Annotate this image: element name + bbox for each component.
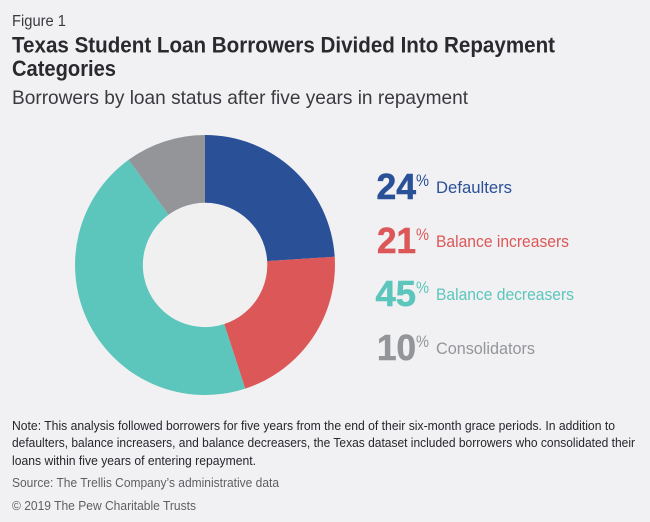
legend xyxy=(376,166,574,368)
title: Categories xyxy=(12,56,116,81)
legend item: defaulters xyxy=(376,166,512,207)
note xyxy=(12,419,635,468)
legend item: defaulters: % xyxy=(416,172,429,190)
legend item: balance increasers xyxy=(377,220,569,261)
legend item: balance increasers: 21 xyxy=(377,220,416,261)
legend item: consolidators xyxy=(377,327,535,368)
segment: balance increasers 21% xyxy=(224,257,335,389)
legend item: defaulters: 24 xyxy=(376,166,416,207)
legend item: consolidators: % xyxy=(416,333,429,351)
legend item: balance increasers: % xyxy=(416,226,429,244)
segment: balance decreasers 45% xyxy=(75,160,245,395)
legend item: balance decreasers xyxy=(376,273,574,314)
segment: consolidators 10% xyxy=(129,135,205,215)
legend item: consolidators: 10 xyxy=(377,327,416,368)
note: Note: This analysis followed borrowers for five years from the end of their six-month grace periods. In addition to xyxy=(12,419,615,433)
donut hole xyxy=(143,203,267,327)
subtitle: Borrowers by loan status after five years in repayment xyxy=(12,87,469,109)
segment: defaulters 24% xyxy=(205,135,335,261)
legend item: balance decreasers: 45 xyxy=(376,273,416,314)
note: loans within five years of entering repayment. xyxy=(12,454,256,468)
source: Source: The Trellis Company’s administrative data xyxy=(12,476,279,490)
legend item: consolidators: Consolidators xyxy=(436,340,535,358)
note: defaulters, balance increasers, and balance decreasers, the Texas dataset included borrowers who consolidated their xyxy=(12,436,635,450)
title xyxy=(12,32,555,81)
legend item: balance decreasers: % xyxy=(416,279,429,297)
figure label: Figure 1 xyxy=(12,13,66,30)
copyright: © 2019 The Pew Charitable Trusts xyxy=(12,499,196,513)
legend item: defaulters: Defaulters xyxy=(436,179,512,197)
legend item: balance increasers: Balance increasers xyxy=(436,233,569,251)
title: Texas Student Loan Borrowers Divided Into Repayment xyxy=(12,32,555,58)
donut chart xyxy=(75,135,335,395)
legend item: balance decreasers: Balance decreasers xyxy=(436,286,574,304)
